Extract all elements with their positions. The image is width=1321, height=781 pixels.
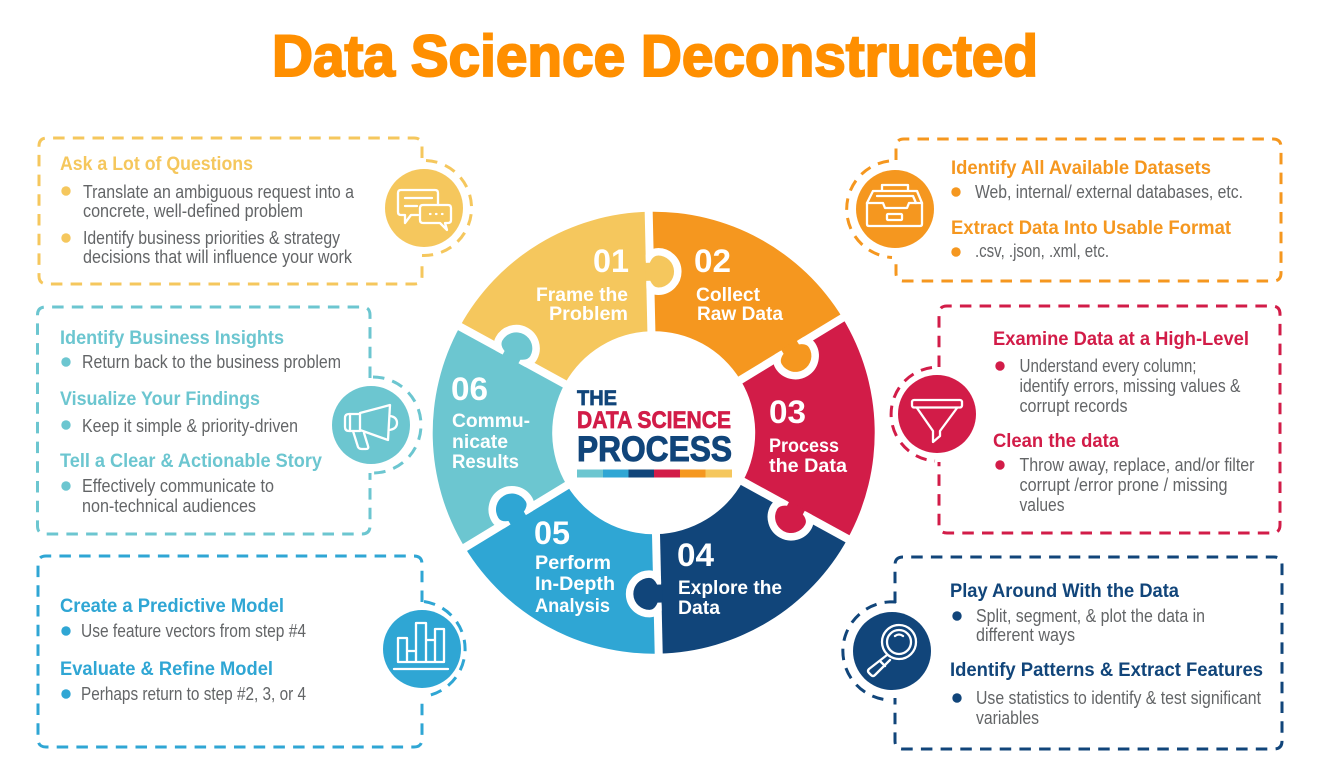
- wheel label 06: Results: [452, 452, 519, 473]
- title: Data Science Deconstructed: [272, 24, 1038, 89]
- wheel label 02: [694, 243, 783, 325]
- heading: Examine Data at a High-Level: [993, 329, 1249, 350]
- puzzle knob 05 to 06: [490, 488, 532, 529]
- bullet: split and plot: [952, 606, 1205, 645]
- wheel label 03: 03: [769, 394, 806, 430]
- bullet: feature vectors: Use feature vectors from step #4: [81, 621, 306, 641]
- wheel label 01: Problem: [549, 304, 628, 325]
- heading: Extract Data Into Usable Format: [951, 218, 1232, 239]
- bullet: non-technical audiences: [61, 476, 274, 516]
- wheel label 04: [677, 537, 782, 619]
- wheel label 06: 06: [451, 371, 488, 407]
- wheel label 03: the Data: [769, 456, 847, 477]
- heading: Tell a Clear & Actionable Story: [60, 451, 322, 472]
- puzzle wheel segments: [432, 212, 875, 654]
- panel: perform in-depth analysis: [38, 556, 465, 747]
- segment 03: [697, 318, 942, 570]
- wheel label 06: [451, 371, 530, 473]
- puzzle knob 02 to 03: [775, 336, 817, 378]
- icon: chat bubbles: [385, 169, 463, 247]
- bullet: file formats: .csv, .json, .xml, etc.: [975, 241, 1109, 261]
- bullet: translate request: Translate an ambiguous request into a: [83, 182, 355, 202]
- bullet: split and plot: different ways: [976, 625, 1075, 645]
- wheel label 06: Commu-: [452, 411, 530, 432]
- center logo: the data science process: DATA SCIENCE: [577, 407, 731, 434]
- wheel label 05: Analysis: [535, 596, 610, 617]
- heading: Identify Patterns & Extract Features: [950, 660, 1263, 681]
- heading: Ask a Lot of Questions: [60, 154, 253, 175]
- wheel label 01: [536, 243, 629, 325]
- bullet: business priorities: decisions that will influence your work: [83, 247, 353, 267]
- wheel label 03: [769, 394, 847, 477]
- bullet: statistics: [952, 688, 1261, 728]
- bullet: understand columns: corrupt records: [1020, 396, 1128, 416]
- wheel label 03: Process: [769, 436, 839, 457]
- heading: Identify Business Insights: [60, 328, 284, 349]
- puzzle knob 06 to 01: [496, 327, 538, 367]
- puzzle knob 01 to 02: [645, 255, 674, 288]
- heading: Create a Predictive Model: [60, 596, 284, 617]
- wheel label 01: Frame the: [536, 285, 628, 306]
- bullet: throw away or filter: [995, 455, 1255, 515]
- heading: Play Around With the Data: [950, 581, 1179, 602]
- bullet: non-technical audiences: Effectively communicate to: [82, 476, 274, 496]
- bullet: understand columns: Understand every column;: [1020, 356, 1196, 376]
- segment 04: [606, 457, 848, 707]
- center logo: the data science process: THE: [577, 387, 617, 410]
- bullet: return to step: Perhaps return to step #2, 3, or 4: [81, 684, 306, 704]
- bullet: split and plot: Split, segment, & plot the data in: [976, 606, 1205, 626]
- icon: megaphone: [332, 386, 410, 464]
- bullet: throw away or filter: corrupt /error prone / missing: [1020, 475, 1228, 495]
- panel: frame the problem: [39, 138, 472, 284]
- panel: collect raw data: [847, 139, 1281, 281]
- bullet: throw away or filter: values: [1020, 495, 1064, 515]
- wheel label 05: 05: [534, 515, 570, 551]
- bullet: return to problem: Return back to the business problem: [82, 352, 341, 372]
- heading: Clean the data: [993, 431, 1119, 452]
- wheel label 05: Perform: [535, 553, 611, 574]
- segment 06: [365, 296, 610, 548]
- puzzle knob 03 to 04: [769, 498, 811, 539]
- icon: file drawer: [856, 170, 934, 248]
- heading: Visualize Your Findings: [60, 389, 260, 410]
- wheel label 04: Data: [678, 598, 720, 619]
- bullet: business priorities: [61, 228, 353, 267]
- bullet: understand columns: identify errors, missing values &: [1020, 376, 1240, 396]
- bullet: translate request: [61, 182, 355, 221]
- bullet: statistics: variables: [976, 708, 1039, 728]
- wheel label 05: In-Depth: [535, 574, 615, 595]
- bullet: translate request: concrete, well-defined problem: [83, 201, 303, 221]
- heading: Evaluate & Refine Model: [60, 659, 273, 680]
- wheel label 02: 02: [694, 243, 731, 279]
- icon: funnel: [898, 375, 976, 453]
- icon: magnifying glass: [853, 612, 931, 690]
- bullet: understand columns: [995, 356, 1240, 416]
- wheel label 06: nicate: [452, 432, 508, 453]
- bullet: web and databases: Web, internal/ external databases, etc.: [975, 182, 1243, 202]
- heading: Identify All Available Datasets: [951, 158, 1211, 179]
- segment 05: [464, 483, 659, 658]
- bullet: business priorities: Identify business priorities & strategy: [83, 228, 340, 248]
- bullet: throw away or filter: Throw away, replace, and/or filter: [1020, 455, 1255, 475]
- wheel label 01: 01: [593, 243, 629, 279]
- wheel label 05: [534, 515, 615, 617]
- bullet: non-technical audiences: non-technical audiences: [82, 496, 256, 516]
- wheel label 02: Collect: [696, 285, 761, 306]
- bullet: keep it simple: Keep it simple & priority-driven: [82, 416, 298, 436]
- bullet: statistics: Use statistics to identify & test significant: [976, 688, 1261, 708]
- center logo: the data science process: [577, 387, 732, 478]
- process wheel: [432, 212, 875, 654]
- wheel label 04: Explore the: [678, 578, 782, 599]
- wheel label 02: Raw Data: [697, 304, 783, 325]
- wheel label 04: 04: [677, 537, 714, 573]
- segment 01: [460, 159, 701, 408]
- puzzle knob 04 to 05: [633, 578, 663, 610]
- panel: process the data: [891, 306, 1280, 533]
- panel: communicate results: [38, 307, 421, 534]
- center logo: the data science process: PROCESS: [577, 430, 732, 469]
- icon: bar chart: [383, 610, 461, 688]
- segment 02: [649, 207, 844, 382]
- panel: explore the data: [843, 557, 1282, 749]
